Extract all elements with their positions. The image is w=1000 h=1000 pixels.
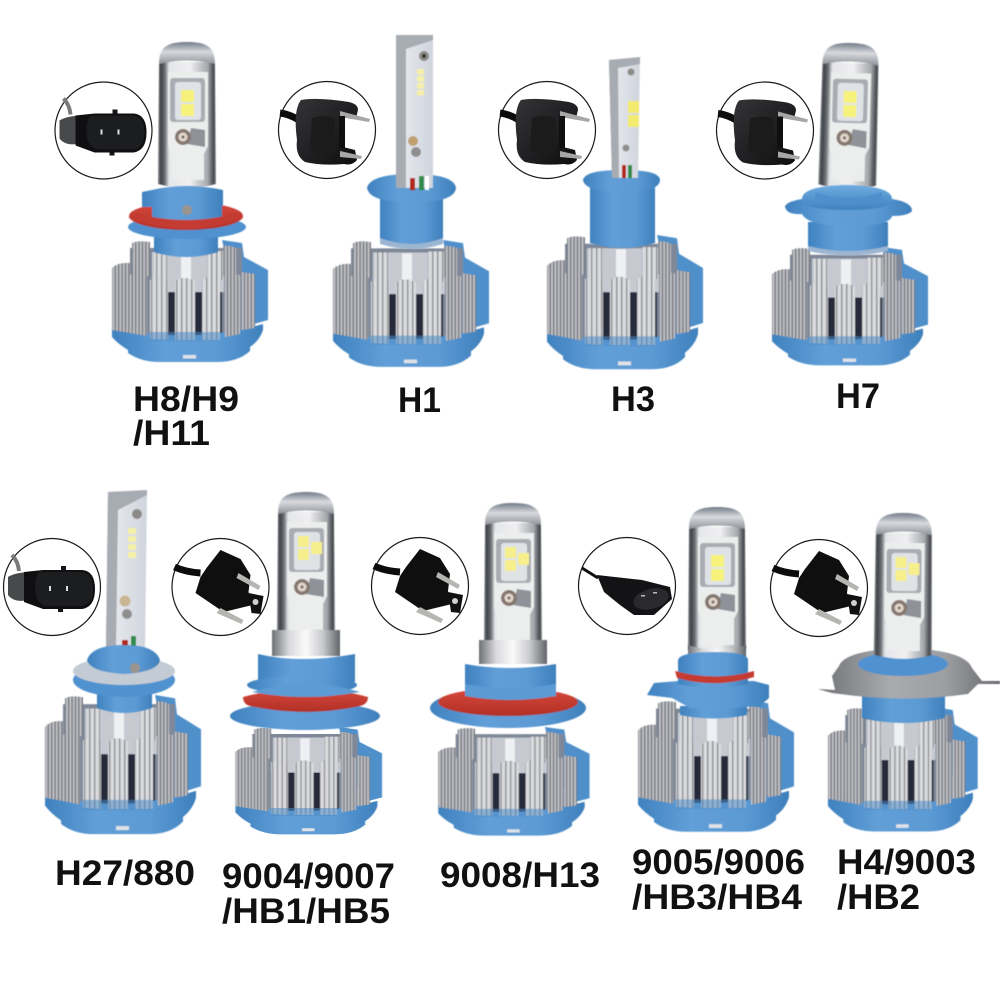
label: H4/9003: [837, 843, 976, 882]
label: [222, 857, 395, 931]
bulb: 9004/9007/HB1/HB5: [172, 492, 395, 931]
metal collar, cap and red ring: [430, 640, 586, 728]
bulb: H27/880: [4, 490, 201, 893]
LED tube: [277, 492, 335, 638]
label: 9004/9007: [222, 857, 395, 896]
connector inset: H4 style plug: [372, 538, 468, 634]
label: /HB1/HB5: [222, 892, 390, 931]
connector inset: two-prong plug: [278, 82, 376, 178]
bulb: 9008/H13: [372, 503, 600, 895]
heat sink: [45, 695, 201, 834]
LED tube: [818, 42, 880, 190]
slim LED board: [396, 35, 433, 190]
heat sink: [333, 240, 489, 367]
collar, red ring and flange: [647, 645, 769, 718]
label: H7: [836, 377, 880, 416]
bulb: H8/H9/H11: [55, 42, 268, 453]
LED tube: [688, 507, 746, 653]
heat sink: [438, 727, 590, 836]
connector inset: H4 style plug: [770, 540, 868, 636]
label: [837, 843, 976, 917]
label: /HB2: [837, 878, 920, 917]
LED tube: [874, 513, 933, 659]
label: H3: [611, 380, 655, 419]
heat sink: [547, 235, 703, 369]
heat sink: [772, 247, 928, 365]
bulb: H7: [716, 42, 928, 416]
connector inset: two-prong plug: [498, 82, 596, 178]
metal flange with blue neck: [818, 648, 1000, 723]
connector inset: H4 style plug: [172, 538, 269, 636]
label: H8/H9: [133, 380, 239, 419]
label: /HB3/HB4: [632, 878, 803, 917]
metal collar, cap and red ring: [230, 630, 380, 730]
socket neck: [583, 170, 660, 248]
label: 9008/H13: [440, 856, 600, 895]
collar with red ring: [128, 186, 246, 257]
connector inset: two-prong plug: [716, 82, 814, 179]
heat sink: [112, 240, 268, 362]
label: H1: [398, 381, 441, 420]
heat sink: [638, 700, 794, 832]
label: 9005/9006: [632, 843, 805, 882]
LED tube: [158, 42, 216, 188]
collar and neck: [785, 185, 912, 256]
bulb: H3: [498, 57, 703, 419]
label: [133, 380, 239, 453]
LED tube: [484, 503, 542, 649]
heat sink: [828, 707, 978, 831]
slim LED board: [106, 490, 147, 650]
bulb: H4/9003/HB2: [770, 513, 1000, 917]
label: H27/880: [55, 854, 195, 893]
bulb: H1: [278, 35, 489, 420]
connector inset: slim oval plug: [578, 538, 676, 634]
heat sink: [235, 727, 382, 834]
label: /H11: [133, 414, 210, 453]
socket neck: [367, 174, 456, 249]
flange and neck: [73, 645, 175, 713]
bulb: 9005/9006/HB3/HB4: [578, 507, 805, 917]
connector inset: two-pin oval: [4, 538, 100, 636]
label: [632, 843, 805, 917]
slim LED board: [609, 57, 640, 178]
connector inset: two-pin oval: [55, 82, 152, 179]
